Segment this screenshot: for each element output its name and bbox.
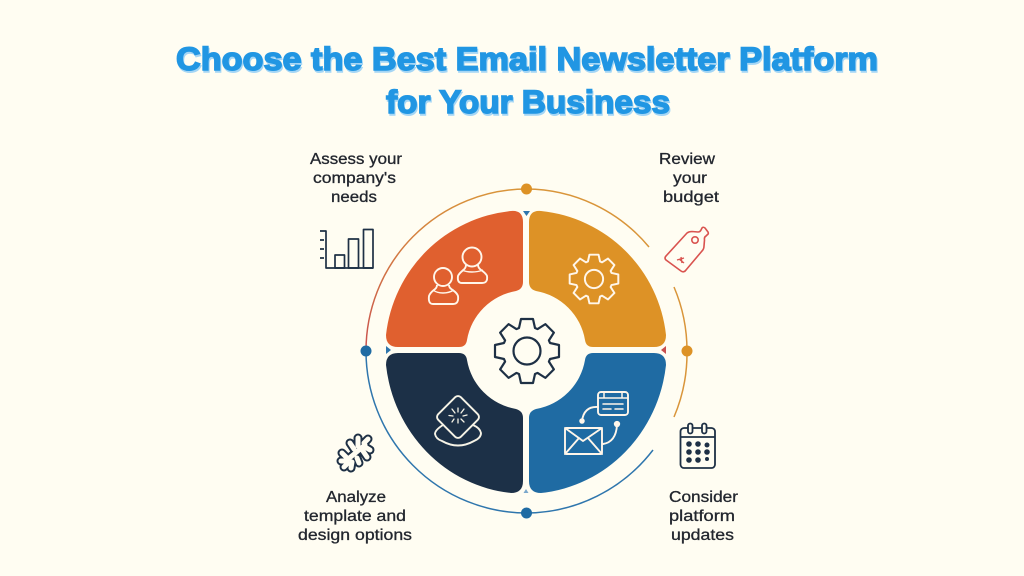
outer ring with nodes — [360, 184, 692, 518]
label: assess needs: needs — [331, 189, 377, 206]
label: assess needs: company's — [313, 170, 396, 187]
panel: blue segment — [529, 353, 666, 493]
label: review budget — [659, 151, 720, 206]
icon: envelope and card — [565, 392, 628, 454]
icon: bar chart — [320, 230, 373, 268]
panel: amber segment — [529, 211, 666, 347]
label: assess needs: Assess your — [310, 151, 402, 168]
label: review budget: budget — [663, 189, 720, 206]
label: analyze template: Analyze — [326, 489, 386, 506]
label: consider updates: platform — [669, 508, 735, 525]
icon: center gear — [495, 319, 559, 383]
label: analyze template: design options — [298, 527, 412, 544]
label: assess needs — [310, 151, 402, 206]
title: Choose the Best Email Newsletter Platform — [176, 41, 878, 77]
icon: amber gear — [570, 255, 618, 303]
label: analyze template — [298, 489, 412, 544]
title — [176, 41, 879, 122]
panel: orange segment — [386, 211, 523, 347]
icon: people — [429, 248, 487, 304]
icon: price tag — [665, 227, 708, 272]
label: consider updates: updates — [671, 527, 734, 544]
panel: navy segment — [386, 353, 523, 493]
title: for Your Business — [386, 84, 670, 120]
icon: calendar — [680, 424, 715, 468]
label: consider updates: Consider — [669, 489, 738, 506]
icon: puzzle chain — [341, 438, 370, 468]
icon: layered diamond — [435, 394, 481, 446]
title: Choose the Best Email Newsletter Platform — [177, 43, 879, 79]
label: analyze template: template and — [304, 508, 406, 525]
label: consider updates — [669, 489, 738, 544]
label: review budget: your — [673, 170, 707, 187]
label: review budget: Review — [659, 151, 716, 168]
title: for Your Business — [387, 86, 671, 122]
